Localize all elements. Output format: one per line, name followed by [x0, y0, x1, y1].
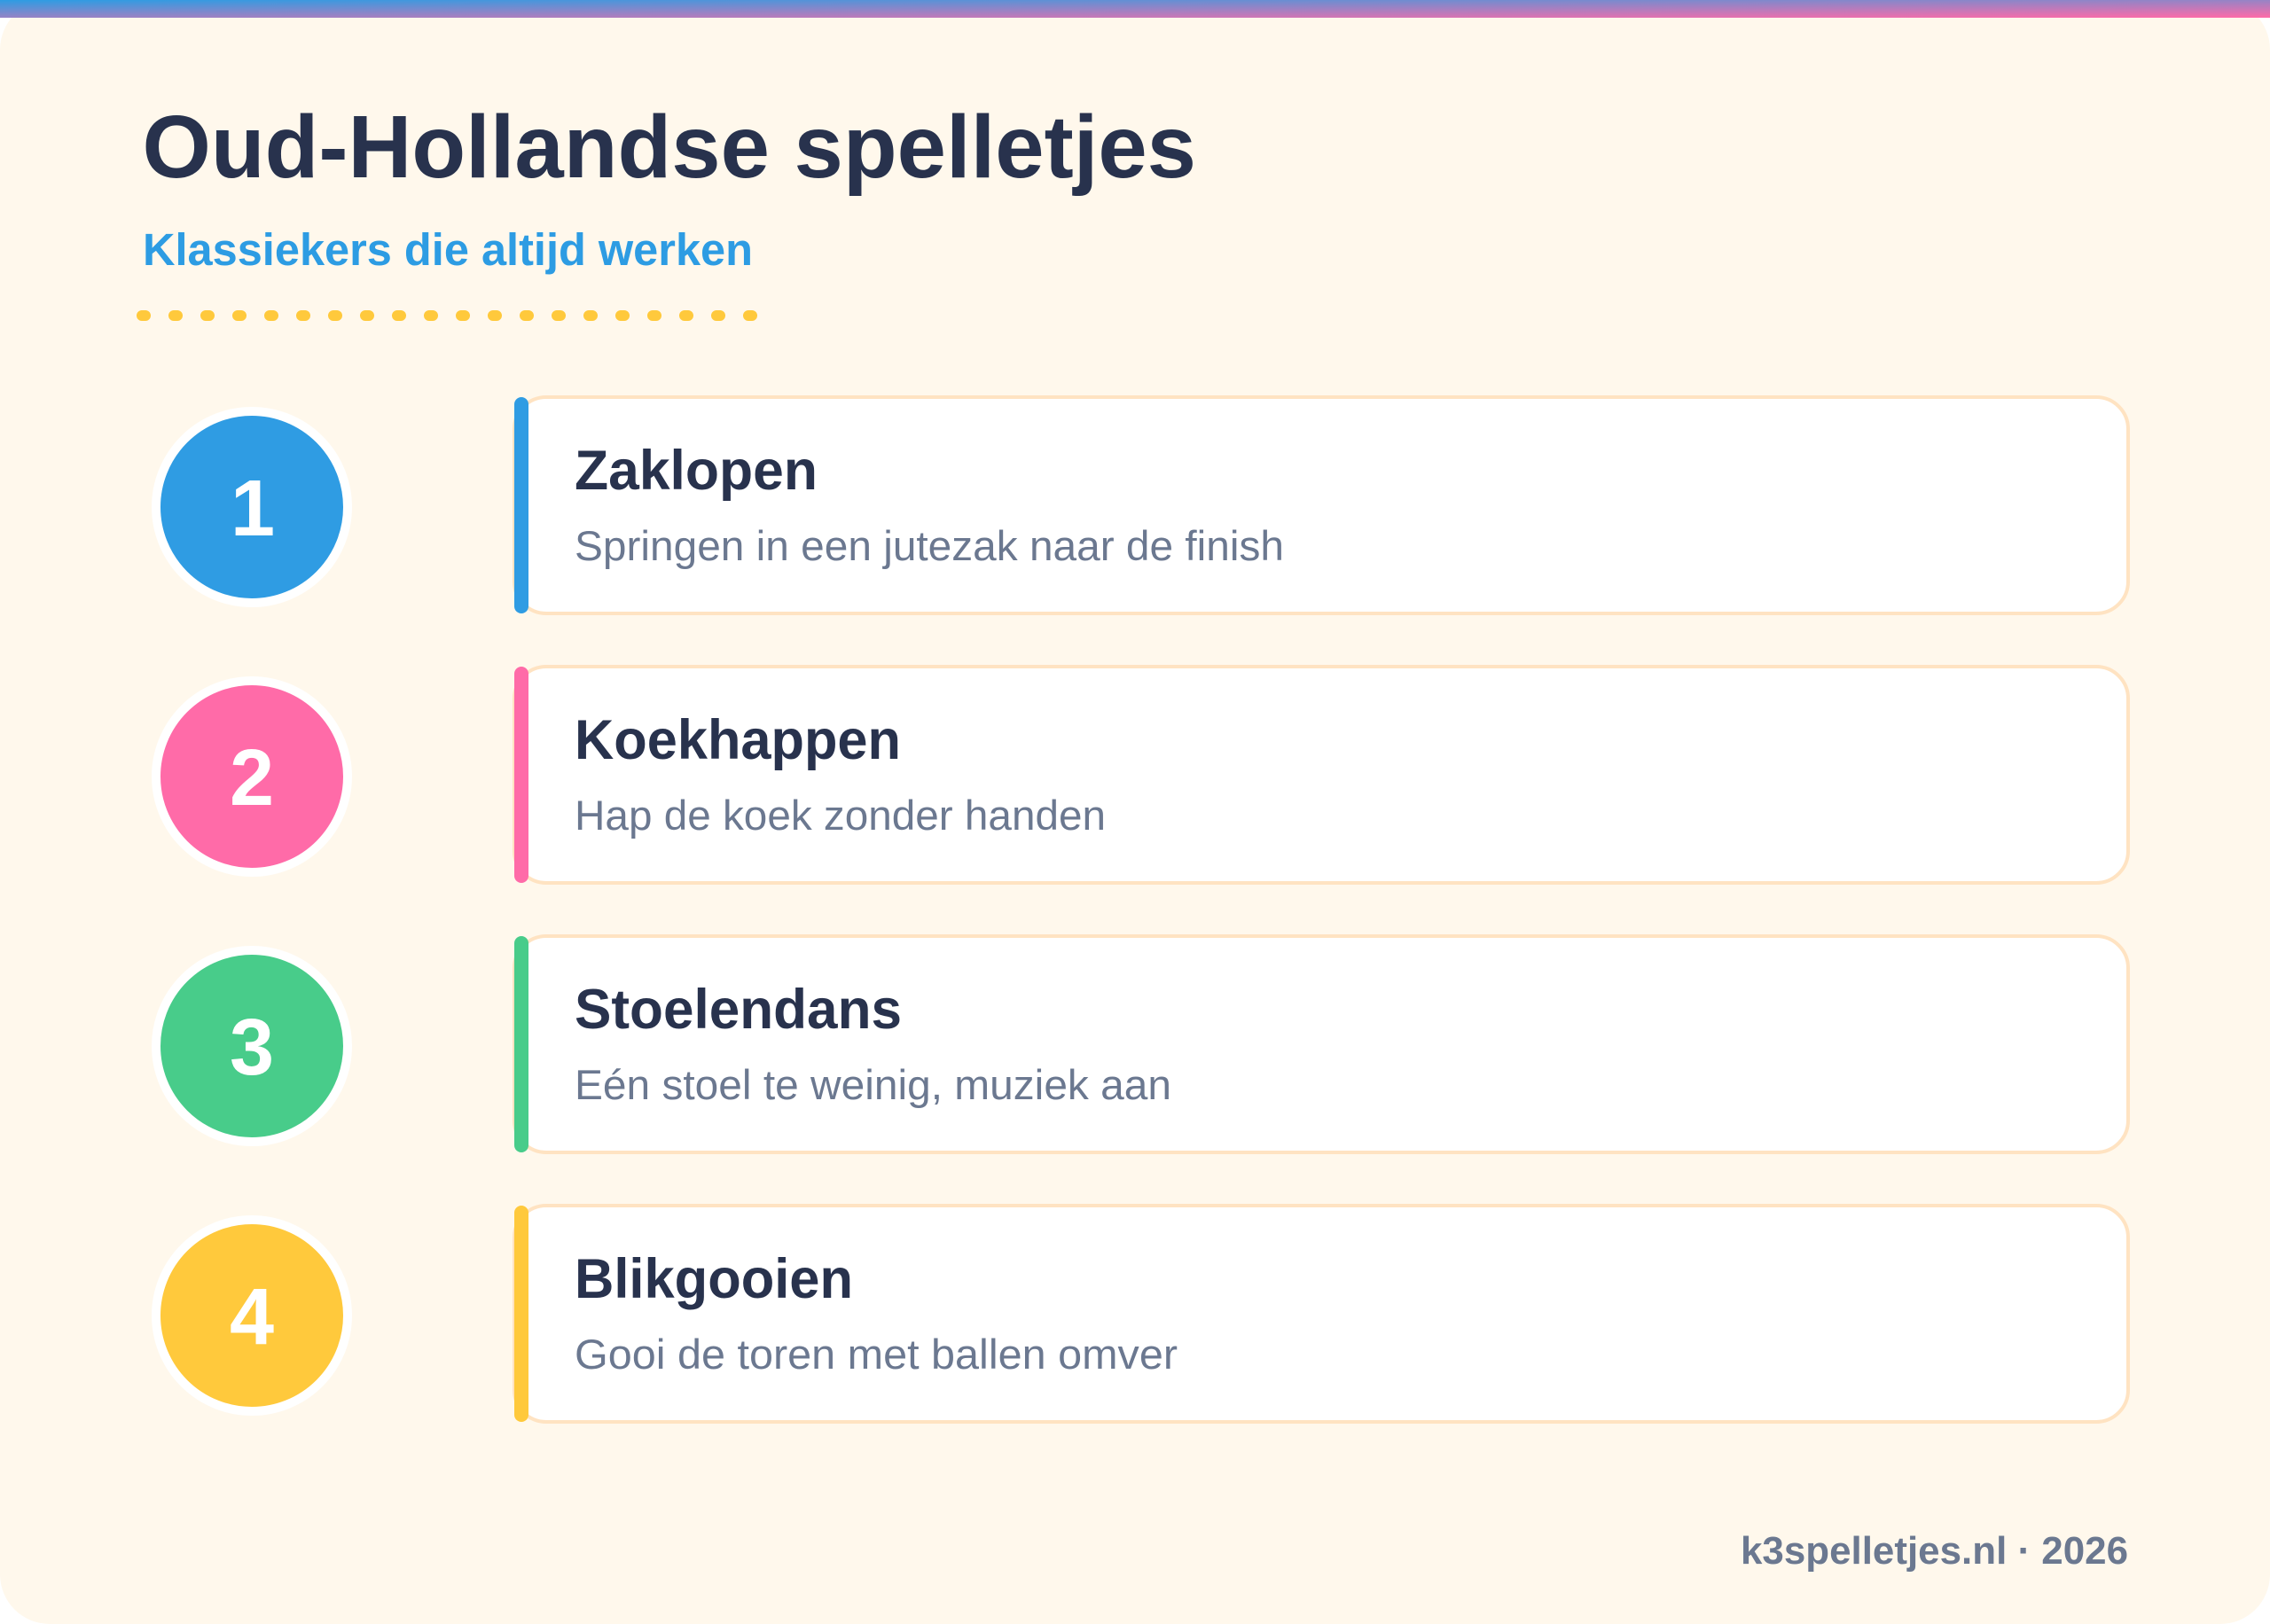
subtitle: Klassiekers die altijd werken: [143, 224, 753, 275]
card 2: [514, 667, 2128, 883]
title: Oud-Hollandse spelletjes: [142, 98, 1196, 197]
number badge 4: 4: [230, 1273, 274, 1362]
card 1 heading: Zaklopen: [575, 440, 818, 502]
card 3 description: Eén stoel te weinig, muziek aan: [575, 1061, 1171, 1108]
number badge 1: [156, 411, 348, 603]
card 2 heading: Koekhappen: [575, 709, 901, 771]
card 2 description: Hap de koek zonder handen: [575, 792, 1106, 839]
card 4: [514, 1206, 2128, 1422]
number badge 2: [156, 681, 348, 872]
number badge 2: 2: [230, 734, 274, 823]
card 1: [514, 397, 2128, 613]
number badge 1: 1: [231, 465, 275, 553]
number badge 4: [156, 1220, 348, 1411]
card 4 description: Gooi de toren met ballen omver: [575, 1331, 1178, 1378]
top gradient bar: [0, 0, 2270, 18]
accent bar 1: [514, 397, 528, 613]
card 4 heading: Blikgooien: [575, 1248, 853, 1310]
accent bar 3: [514, 936, 528, 1152]
accent bar 4: [514, 1206, 528, 1422]
card 3: [514, 936, 2128, 1152]
step 1: Zaklopen: [156, 397, 2128, 613]
step 2: Koekhappen: [156, 667, 2128, 883]
number badge 3: 3: [230, 1003, 274, 1092]
footer credit: k3spelletjes.nl · 2026: [1741, 1529, 2128, 1573]
number badge 3: [156, 950, 348, 1142]
dotted divider: [142, 310, 754, 321]
step 3: Stoelendans: [156, 936, 2128, 1152]
step 4: Blikgooien: [156, 1206, 2128, 1422]
card 1 description: Springen in een jutezak naar de finish: [575, 522, 1284, 569]
accent bar 2: [514, 667, 528, 883]
card 3 heading: Stoelendans: [575, 979, 902, 1041]
